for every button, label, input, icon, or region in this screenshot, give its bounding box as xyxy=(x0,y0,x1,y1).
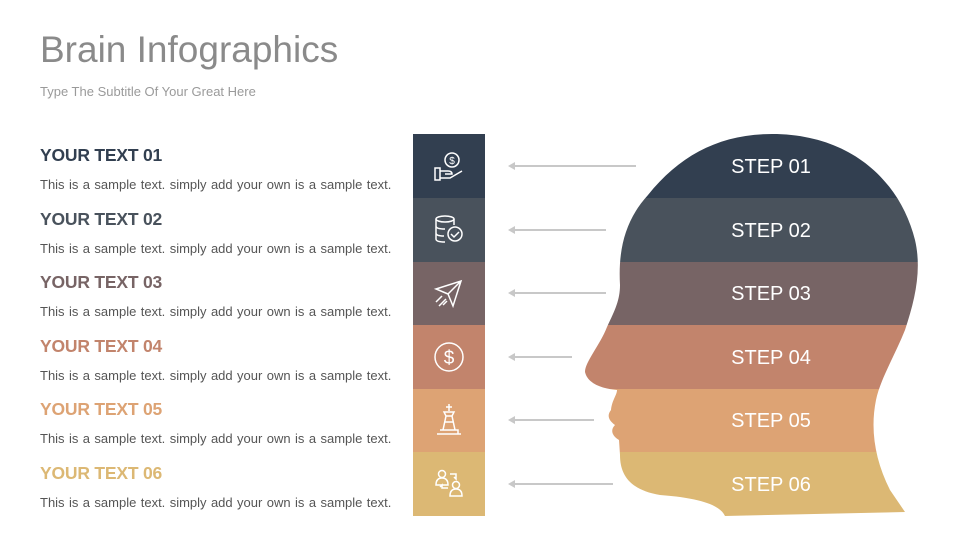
step labels xyxy=(731,156,811,496)
title: Brain Infographics xyxy=(40,29,338,70)
text block 2: This is a sample text. simply add your own is a sample text. xyxy=(40,241,391,256)
step labels: STEP 05 xyxy=(731,410,811,432)
diagram xyxy=(413,134,918,516)
text block 1: YOUR TEXT 01 xyxy=(40,145,162,165)
text block 5: This is a sample text. simply add your own is a sample text. xyxy=(40,431,391,446)
text block 2 xyxy=(40,209,391,256)
subtitle: Type The Subtitle Of Your Great Here xyxy=(40,84,256,99)
text block 2: YOUR TEXT 02 xyxy=(40,209,162,229)
text block 1: This is a sample text. simply add your own is a sample text. xyxy=(40,177,391,192)
text block 4: This is a sample text. simply add your own is a sample text. xyxy=(40,368,391,383)
icon: money hand xyxy=(435,153,462,180)
text block 4: YOUR TEXT 04 xyxy=(40,336,162,356)
text block 6: YOUR TEXT 06 xyxy=(40,463,162,483)
head silhouette xyxy=(585,134,918,516)
text block 1 xyxy=(40,145,391,192)
step labels: STEP 04 xyxy=(731,347,811,369)
step labels: STEP 02 xyxy=(731,220,811,242)
icon: dollar coin xyxy=(435,343,463,371)
text block 4 xyxy=(40,336,391,383)
icon column xyxy=(413,134,485,516)
icon: money hand: $ xyxy=(449,156,455,167)
text block 3: YOUR TEXT 03 xyxy=(40,272,162,292)
arrows xyxy=(508,162,636,488)
text block 6 xyxy=(40,463,391,510)
icon: dollar coin: $ xyxy=(444,348,455,369)
text block 6: This is a sample text. simply add your own is a sample text. xyxy=(40,495,391,510)
step labels: STEP 06 xyxy=(731,474,811,496)
text block 3 xyxy=(40,272,391,319)
icon: paper plane xyxy=(436,281,461,306)
text block 5: YOUR TEXT 05 xyxy=(40,399,162,419)
text block 5 xyxy=(40,399,391,446)
text block 3: This is a sample text. simply add your own is a sample text. xyxy=(40,304,391,319)
icon: people exchange xyxy=(436,470,462,496)
icon: database check xyxy=(436,216,462,242)
step labels: STEP 03 xyxy=(731,283,811,305)
step labels: STEP 01 xyxy=(731,156,811,178)
icon: chess king xyxy=(437,404,461,434)
